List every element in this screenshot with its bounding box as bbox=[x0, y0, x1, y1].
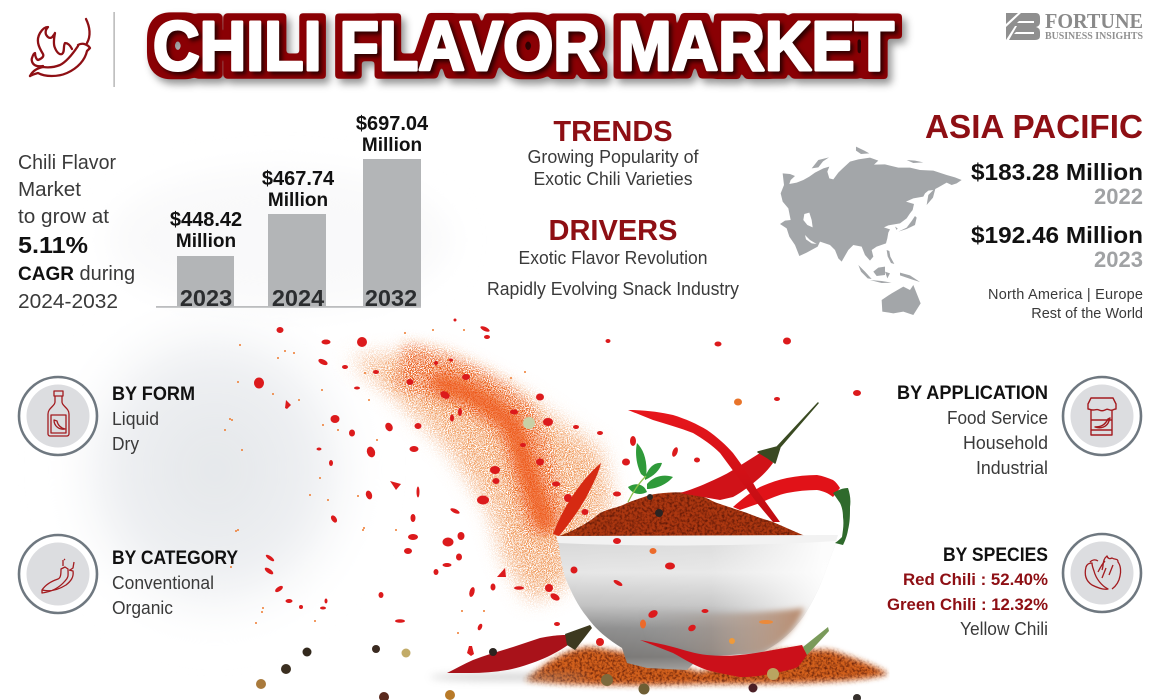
trends block: TRENDS bbox=[553, 116, 673, 148]
bar 2023: Million bbox=[176, 231, 236, 252]
faint speckled cloud bbox=[350, 355, 612, 600]
heading and items bbox=[887, 545, 1048, 639]
other regions bbox=[988, 287, 1143, 322]
heading and items bbox=[112, 384, 195, 454]
CAGR text block: 5.11% bbox=[18, 232, 88, 258]
heading and items: BY FORM bbox=[112, 384, 195, 405]
CAGR text block: Market bbox=[18, 179, 81, 201]
flakes on bowl bbox=[570, 538, 773, 644]
bar 2024: 2024 bbox=[272, 285, 324, 311]
header divider bbox=[114, 12, 115, 87]
CAGR text block: CAGR during bbox=[18, 263, 135, 285]
background haze bbox=[45, 170, 450, 650]
lower left chili bbox=[447, 625, 592, 673]
CAGR text block bbox=[18, 152, 135, 313]
Asia Pacific figures: $192.46 Million bbox=[971, 222, 1143, 248]
icon: sauce bottle bbox=[19, 377, 97, 455]
icon: chili peppers bbox=[19, 535, 97, 613]
front chili bbox=[628, 410, 780, 522]
heading and items: Green Chili : 12.32% bbox=[887, 595, 1048, 614]
bowl body bbox=[558, 540, 837, 670]
floor shadow bbox=[430, 673, 590, 681]
falling chili bbox=[553, 463, 601, 536]
trends block: Exotic Chili Varieties bbox=[534, 169, 692, 189]
heading and items: Household bbox=[963, 433, 1048, 453]
bar 2032: 2032 bbox=[365, 285, 417, 311]
heading and items: BY APPLICATION bbox=[897, 383, 1048, 404]
title: CHILI FLAVOR MARKET bbox=[153, 7, 894, 85]
Asia Pacific figures: 2023 bbox=[1094, 247, 1143, 272]
icon: mixed chilies bbox=[1063, 534, 1141, 612]
bar 2023: 2023 bbox=[180, 285, 232, 311]
header logo icon: chili flame bbox=[30, 19, 90, 76]
powder heap bbox=[555, 492, 805, 538]
back chili bbox=[680, 453, 773, 500]
peppercorns bbox=[256, 417, 861, 700]
brand logo: Fortune Business Insights: FORTUNE bbox=[1045, 9, 1143, 33]
heading and items bbox=[112, 548, 238, 618]
ground powder bbox=[525, 647, 888, 685]
bar 2023: $448.42 bbox=[170, 209, 242, 231]
Asia Pacific figures: $183.28 Million bbox=[971, 159, 1143, 185]
heading and items: BY SPECIES bbox=[943, 545, 1048, 566]
trends block: Growing Popularity of bbox=[528, 147, 699, 167]
segment: by species bbox=[887, 534, 1141, 639]
trends block bbox=[528, 116, 699, 189]
heading and items: BY CATEGORY bbox=[112, 548, 238, 569]
dense stream bbox=[440, 383, 546, 524]
Asia Pacific map bbox=[780, 147, 962, 315]
drivers block: Rapidly Evolving Snack Industry bbox=[487, 279, 739, 299]
heading and items: Conventional bbox=[112, 573, 214, 593]
bowl rim bbox=[556, 535, 838, 545]
bowl bbox=[430, 492, 888, 685]
bar 2024 bbox=[262, 168, 335, 311]
heading and items: Red Chili : 52.40% bbox=[903, 570, 1048, 589]
heading and items: Industrial bbox=[976, 458, 1048, 478]
bar chart bbox=[156, 113, 429, 311]
bowl light side bbox=[558, 540, 837, 670]
bar 2032 bbox=[356, 113, 429, 311]
CAGR text block: to grow at bbox=[18, 206, 109, 228]
bar 2024: $467.74 bbox=[262, 168, 335, 190]
drivers block bbox=[487, 215, 739, 299]
bar 2032: $697.04 bbox=[356, 113, 429, 135]
chili flakes bbox=[254, 318, 861, 656]
Asia Pacific figures: 2022 bbox=[1094, 184, 1143, 209]
parsley sprig bbox=[628, 443, 673, 502]
green chili stem bbox=[758, 403, 818, 463]
bar 2024: Million bbox=[268, 190, 328, 211]
heading and items: Dry bbox=[112, 434, 139, 454]
small pepper specks bbox=[225, 330, 525, 633]
segment: by category bbox=[19, 535, 238, 618]
brand logo: Fortune Business Insights: BUSINESS INSIGHTS bbox=[1045, 31, 1143, 42]
bar 2023 bbox=[170, 209, 242, 311]
bar 2032: Million bbox=[362, 135, 422, 156]
segment: by form bbox=[19, 377, 195, 455]
drivers block: Exotic Flavor Revolution bbox=[518, 248, 708, 268]
segment: by application bbox=[897, 377, 1141, 478]
heading and items bbox=[897, 383, 1048, 478]
other regions: North America | Europe bbox=[988, 287, 1143, 303]
lower right chili bbox=[640, 627, 829, 677]
CAGR text block: 2024-2032 bbox=[18, 291, 118, 313]
Asia Pacific figures: ASIA PACIFIC bbox=[925, 108, 1143, 145]
Asia Pacific figures bbox=[925, 108, 1143, 272]
brand logo: Fortune Business Insights bbox=[1006, 9, 1143, 42]
icon: chili jar bbox=[1063, 377, 1141, 455]
powder plume bbox=[350, 355, 612, 600]
bowl lower tint bbox=[640, 608, 804, 655]
heading and items: Organic bbox=[112, 598, 173, 618]
heading and items: Food Service bbox=[947, 408, 1048, 428]
heading and items: Liquid bbox=[112, 409, 159, 429]
right chili bbox=[733, 475, 850, 545]
drivers block: DRIVERS bbox=[549, 215, 677, 247]
heading and items: Yellow Chili bbox=[960, 619, 1048, 639]
chart baseline bbox=[156, 306, 421, 308]
CAGR text block: Chili Flavor bbox=[18, 152, 116, 174]
other regions: Rest of the World bbox=[1031, 306, 1143, 322]
